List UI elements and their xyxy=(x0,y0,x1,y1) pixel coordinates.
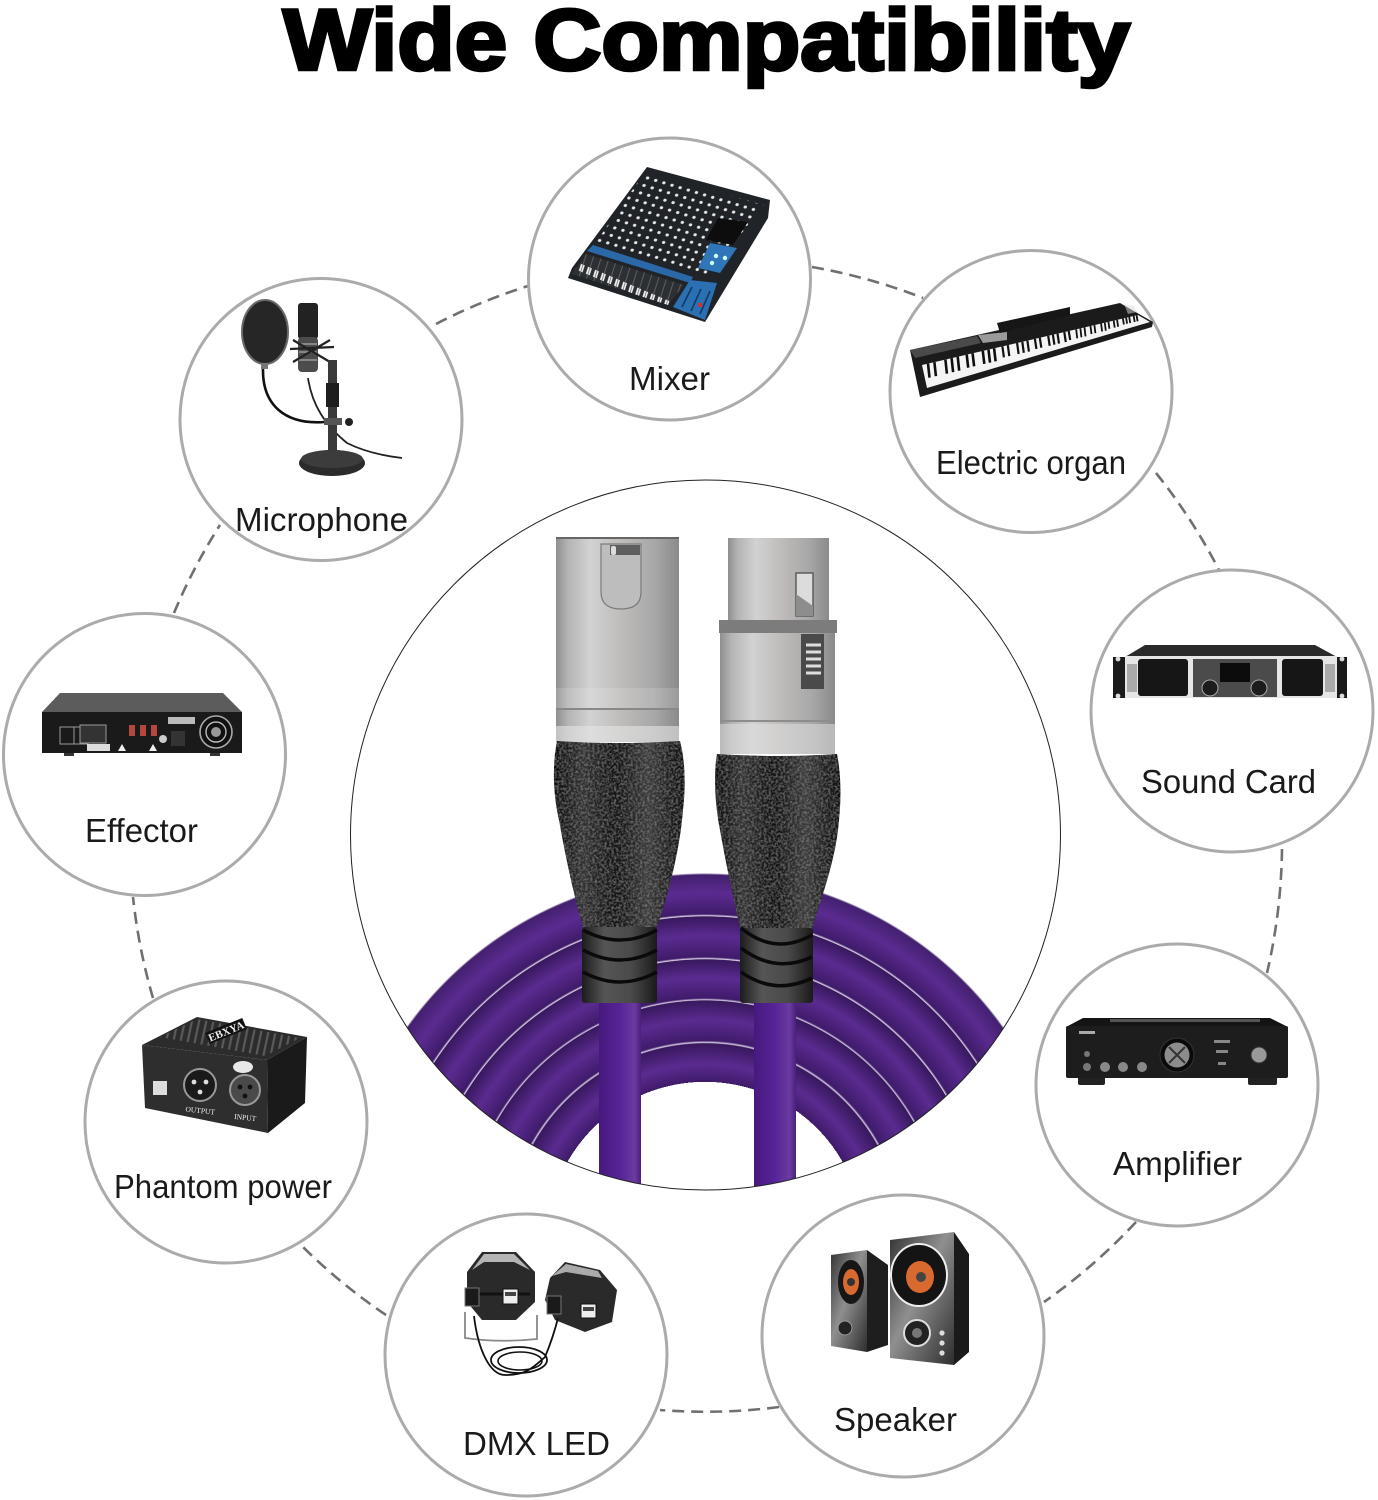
label: Mixer: Mixer xyxy=(629,360,710,397)
male XLR connector xyxy=(554,537,685,1003)
label: Speaker: Speaker xyxy=(834,1401,957,1438)
label: Electric organ: Electric organ xyxy=(936,444,1126,481)
icon: bookshelf speakers xyxy=(831,1232,969,1365)
panel: DMX LED xyxy=(385,1214,667,1496)
label: Effector: Effector xyxy=(85,812,198,849)
label: Amplifier: Amplifier xyxy=(1113,1145,1242,1182)
label: Phantom power: Phantom power xyxy=(114,1168,332,1205)
icon: phantom power box: OUTPUT xyxy=(185,1104,216,1117)
panel: sound card xyxy=(1091,570,1373,852)
icon: rack effector rear panel xyxy=(42,693,242,756)
icon: phantom power box xyxy=(142,1017,307,1133)
icon: phantom power box: EBXYA xyxy=(207,1019,246,1045)
icon: rack power unit xyxy=(1113,645,1347,698)
female XLR connector xyxy=(715,538,840,1003)
purple cable coil xyxy=(407,873,1004,1186)
icon: DMX LED par lights xyxy=(465,1252,617,1375)
panel: phantom power xyxy=(85,981,367,1263)
icon: phantom power box: INPUT xyxy=(234,1112,257,1123)
panel: electric organ xyxy=(890,250,1172,532)
icon: stereo amplifier xyxy=(1066,1018,1288,1085)
label: Sound Card: Sound Card xyxy=(1141,763,1316,800)
icon: mixing console xyxy=(568,167,770,322)
panel: amplifier xyxy=(1036,944,1318,1226)
label: DMX LED: DMX LED xyxy=(463,1425,610,1462)
dashed ring connecting the devices xyxy=(133,267,1282,1412)
panel: mixer xyxy=(528,138,810,420)
panel: microphone xyxy=(180,278,462,560)
label: Microphone: Microphone xyxy=(235,501,408,538)
panel: XLR cable centre circle xyxy=(350,480,1060,1190)
icon: digital piano keyboard xyxy=(910,303,1153,397)
icon: studio microphone on stand xyxy=(242,300,402,476)
panel: speaker xyxy=(762,1195,1044,1477)
panel: effector xyxy=(4,614,286,896)
